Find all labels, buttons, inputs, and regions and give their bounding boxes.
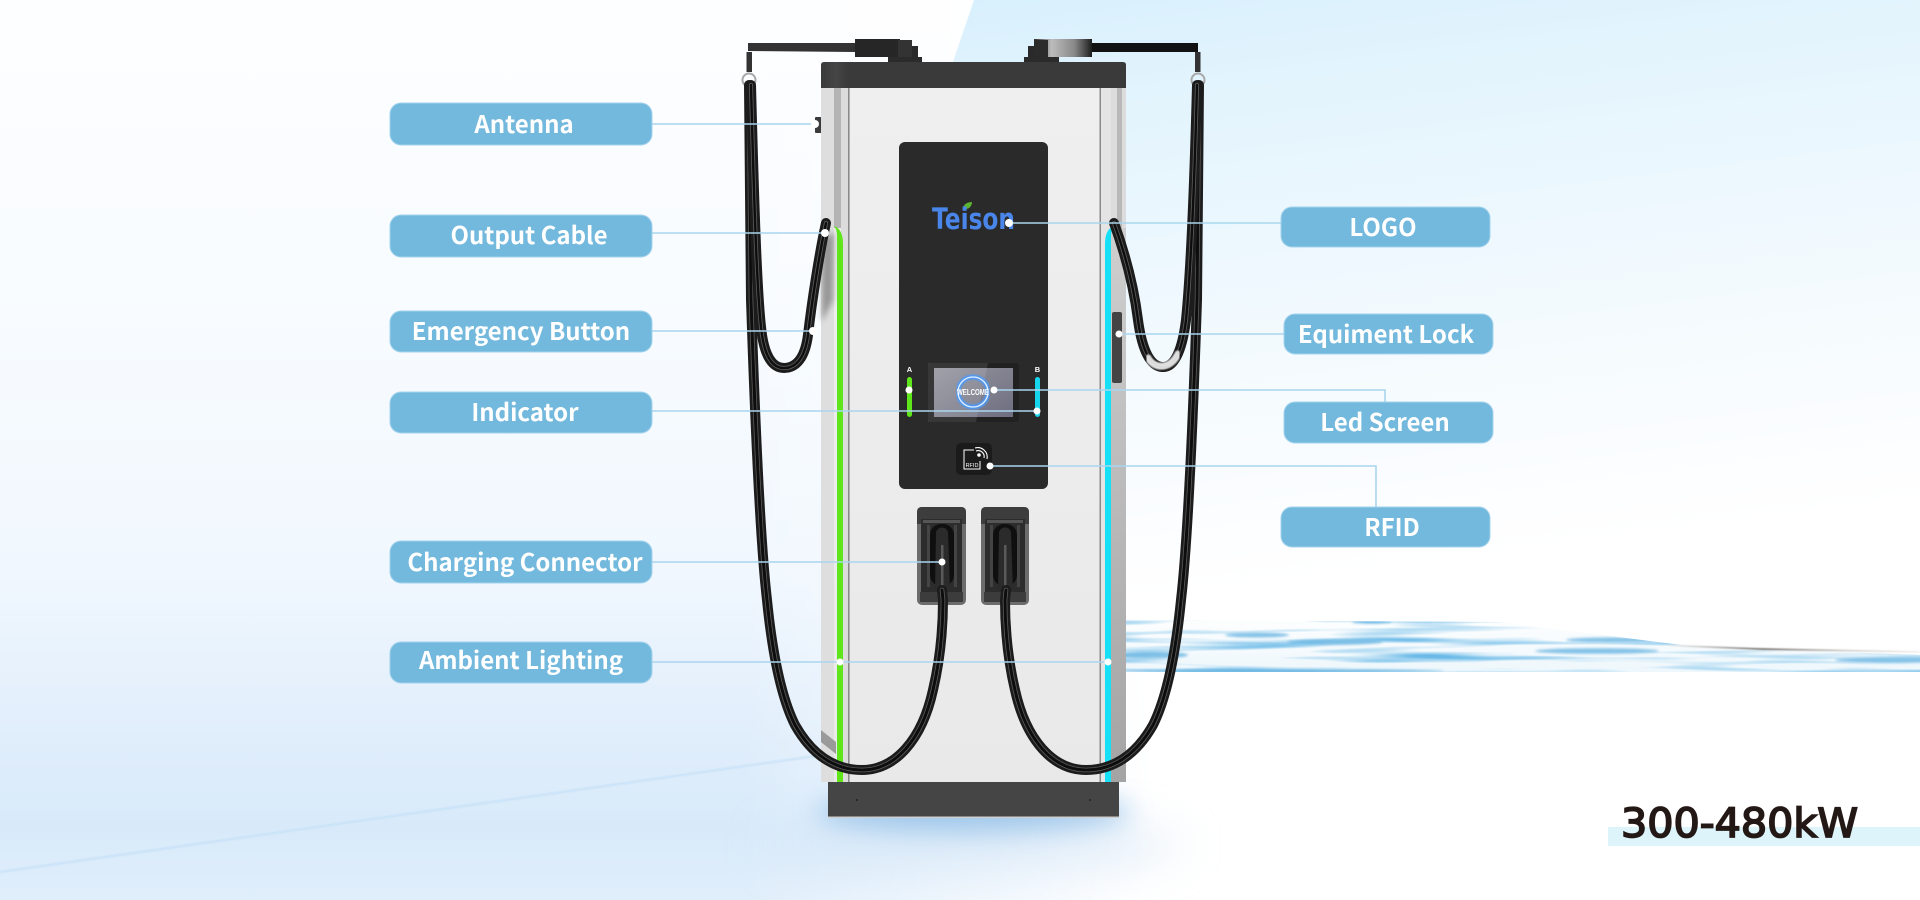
indicator B: B bbox=[1035, 365, 1041, 374]
water waves bbox=[1115, 620, 1920, 673]
indicator A: A bbox=[907, 365, 913, 374]
callout: Antenna: Antenna bbox=[473, 105, 574, 140]
front panel bbox=[899, 142, 1048, 489]
output cable: right short loop bbox=[1114, 85, 1197, 367]
RFID reader bbox=[956, 443, 992, 475]
ambient light strip: green bbox=[834, 226, 843, 782]
callout: Equiment Lock: Equiment Lock bbox=[1298, 315, 1475, 350]
callout: Led Screen bbox=[990, 386, 1493, 443]
background: right blue panel bbox=[940, 0, 1920, 620]
callout: RFID bbox=[986, 462, 1490, 547]
callout: Indicator: Indicator bbox=[471, 393, 579, 428]
output cable: left long loop bbox=[749, 85, 943, 770]
background: left soft blue floor bbox=[0, 344, 1045, 900]
base plinth bbox=[828, 782, 1119, 818]
connector holster A bbox=[917, 507, 966, 605]
callout: Charging Connector: Charging Connector bbox=[407, 543, 643, 578]
output cable: right long loop bbox=[1005, 85, 1199, 770]
callout: LOGO: LOGO bbox=[1349, 208, 1417, 243]
top cap bbox=[821, 62, 1126, 88]
callout: Emergency Button bbox=[390, 311, 817, 352]
touch screen bbox=[928, 363, 1019, 422]
ambient light strip: cyan bbox=[1105, 226, 1114, 782]
callout: Output Cable: Output Cable bbox=[450, 216, 608, 251]
indicator A bbox=[907, 365, 913, 417]
callout: Emergency Button: Emergency Button bbox=[412, 312, 630, 347]
callout: Equiment Lock bbox=[1116, 314, 1493, 354]
callout: Output Cable bbox=[390, 215, 829, 257]
equipment lock bbox=[1112, 312, 1122, 383]
callout: Charging Connector bbox=[390, 541, 946, 583]
logo: Teison bbox=[932, 202, 1015, 236]
right cable arm bbox=[1024, 39, 1204, 86]
floor shadow bbox=[763, 792, 1183, 871]
callout: Ambient Lighting: Ambient Lighting bbox=[418, 641, 623, 676]
antenna bbox=[815, 117, 822, 133]
charger: EV charging station bbox=[742, 39, 1204, 871]
callout: Indicator bbox=[390, 386, 1040, 433]
callout: Led Screen: Led Screen bbox=[1320, 403, 1450, 438]
connector holster B bbox=[981, 507, 1029, 605]
horizon line bbox=[1660, 645, 1920, 652]
left cable arm bbox=[742, 39, 922, 86]
cabinet body bbox=[821, 88, 1126, 782]
touch screen: WELCOME bbox=[957, 388, 990, 397]
output cable: left short loop bbox=[751, 85, 826, 368]
callout: LOGO bbox=[1005, 207, 1490, 247]
callout: RFID: RFID bbox=[1364, 508, 1420, 543]
callout: Ambient Lighting bbox=[390, 641, 1112, 683]
indicator B bbox=[1035, 365, 1041, 417]
callout: Antenna bbox=[390, 103, 819, 145]
power rating: 300-480kW bbox=[1621, 801, 1858, 847]
RFID reader: RFID bbox=[966, 463, 978, 469]
